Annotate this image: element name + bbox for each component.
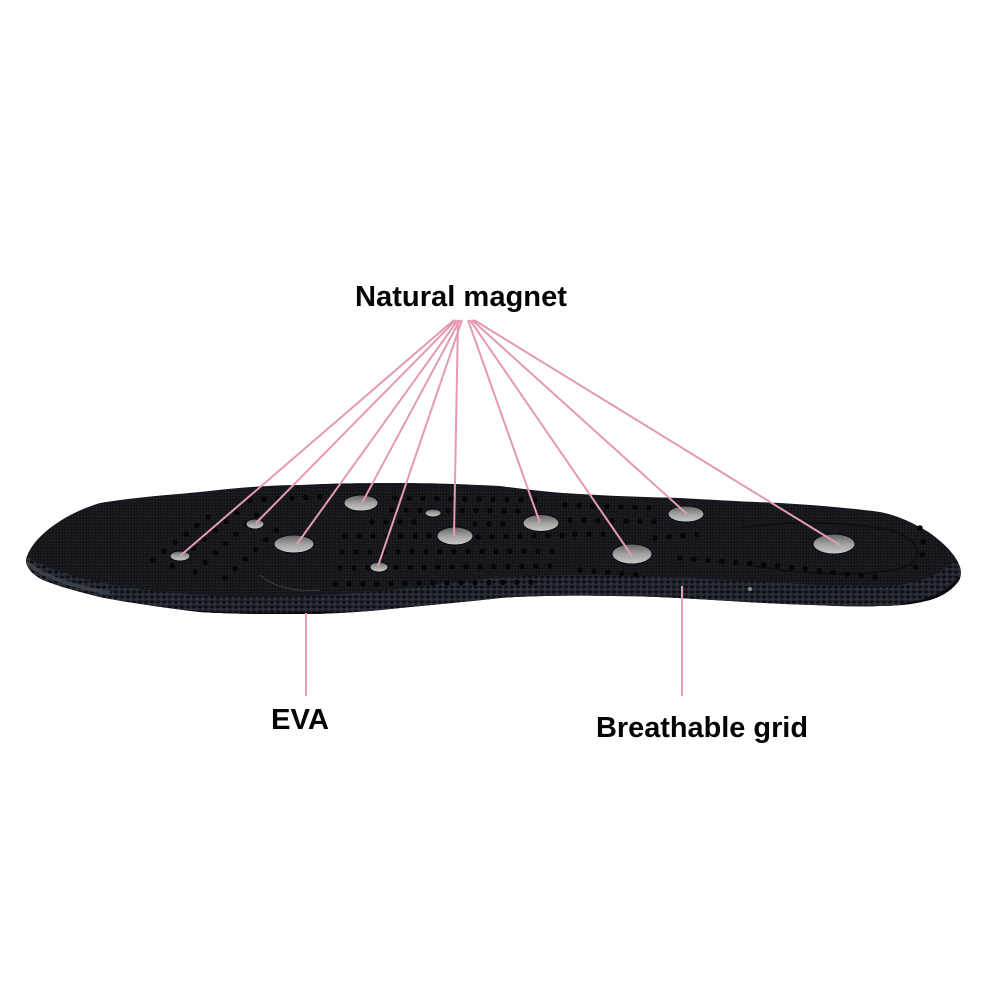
insole body — [26, 483, 961, 614]
label: EVA: EVA — [271, 704, 329, 736]
leader line: EVA — [305, 613, 307, 696]
leader line: breathable grid — [681, 586, 683, 696]
insole — [20, 483, 975, 625]
label: breathable grid: Breathable grid — [596, 712, 808, 744]
magnets — [170, 495, 855, 572]
label: natural magnet: Natural magnet — [355, 281, 568, 313]
woven rim — [26, 522, 961, 614]
leader lines: natural magnet — [180, 320, 840, 566]
massage dots — [153, 497, 925, 584]
